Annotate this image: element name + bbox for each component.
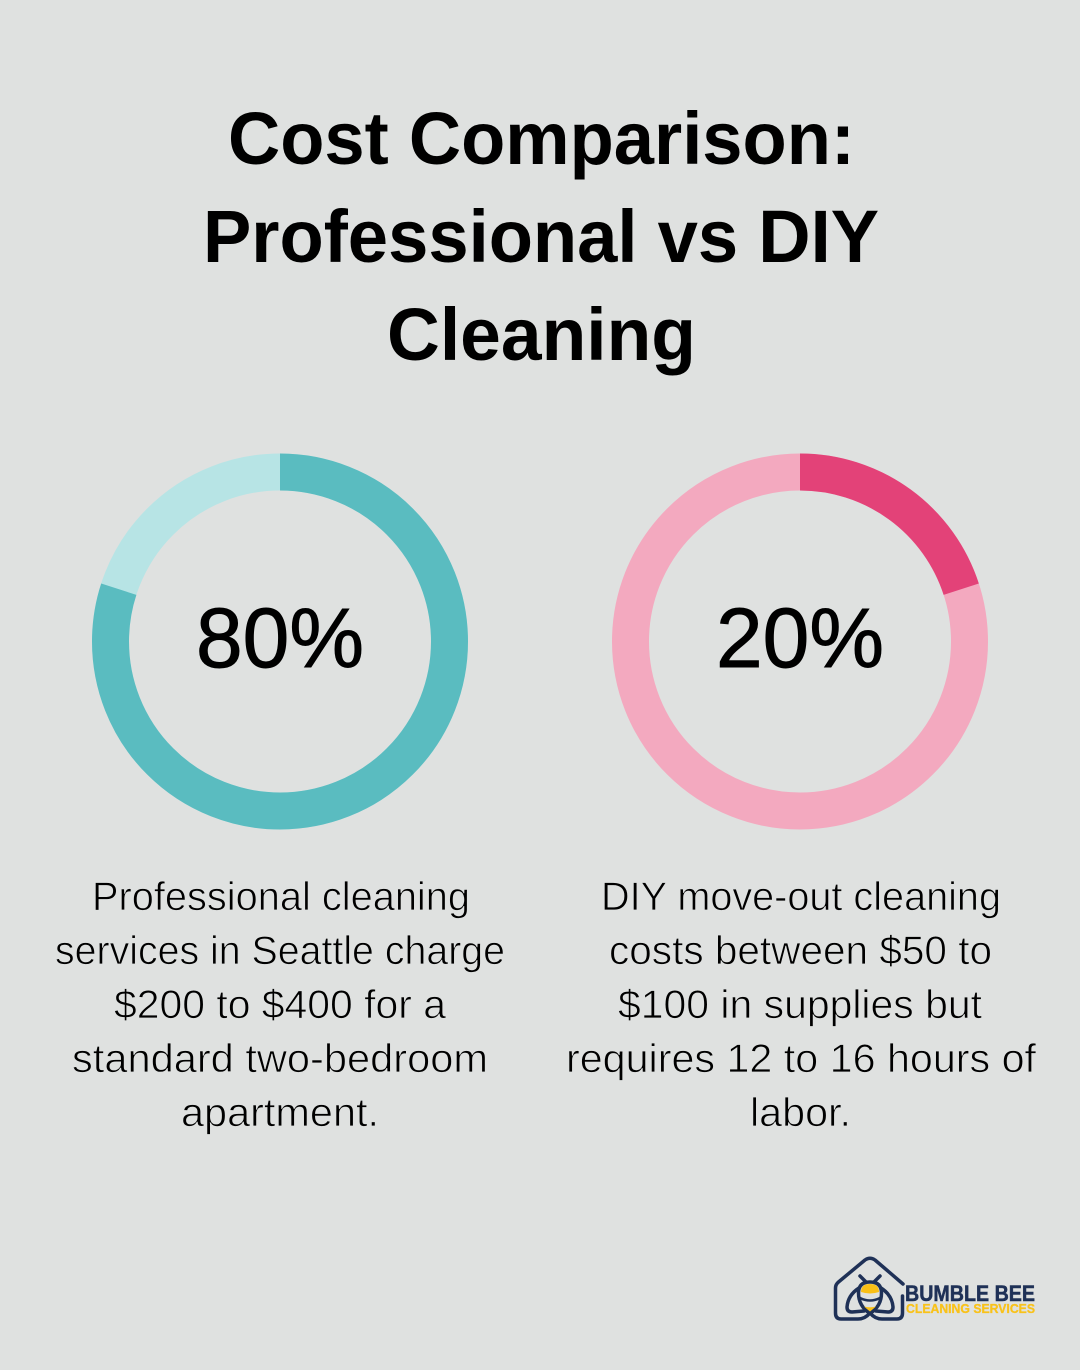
title: Cleaning [387,293,696,376]
title: Cost Comparison: [228,97,855,180]
title [203,97,879,376]
text: DIY cost description: costs between $50 to [609,929,992,973]
logo: Bumble Bee Cleaning Services [836,1258,1035,1319]
donut chart: 20%: 20% [716,591,884,685]
icon: house with bee [836,1258,903,1319]
logo wordmark: CLEANING SERVICES [906,1302,1035,1316]
text: DIY cost description: DIY move-out cleaning [601,875,1001,919]
text: DIY cost description: labor. [750,1091,851,1135]
logo wordmark: BUMBLE BEE [905,1281,1035,1306]
donut chart: 20% [630,472,970,811]
donut chart: 80%: 80% [196,591,364,685]
logo wordmark [905,1281,1035,1316]
text: professional cost description: Professional cleaning [92,875,470,919]
text: professional cost description: $200 to $400 for a [114,983,447,1027]
text: professional cost description: standard two-bedroom [72,1037,488,1081]
text: professional cost description: services in Seattle charge [55,929,505,973]
text: DIY cost description [566,875,1037,1135]
donut chart: 80% [110,472,450,811]
title: Professional vs DIY [203,195,879,278]
text: DIY cost description: requires 12 to 16 hours of [566,1037,1037,1081]
panel: DIY cleaning [566,472,1037,1135]
text: professional cost description: apartment. [181,1091,379,1135]
panel: professional cleaning [55,472,505,1135]
text: professional cost description [55,875,505,1135]
text: DIY cost description: $100 in supplies but [618,983,982,1027]
